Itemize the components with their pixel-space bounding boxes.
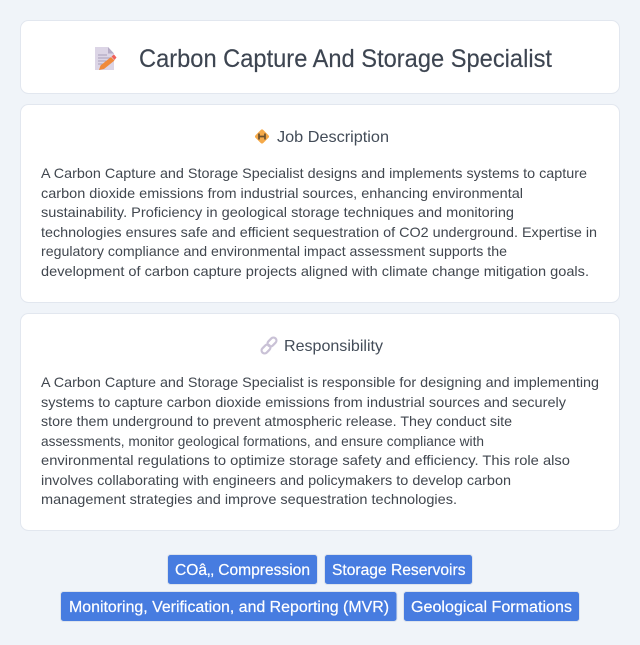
tag: CO2 compression: COâ‚‚ Compression — [175, 562, 310, 579]
text block: job description: sustainability. Proficiency in geological storage techniques and monitoring — [41, 205, 514, 220]
text block: job description: technologies ensures safe and efficient sequestration of CO2 underground. Expertise in — [41, 225, 597, 240]
heading: responsibility: Responsibility — [284, 338, 383, 355]
title: Carbon Capture And Storage Specialist — [139, 45, 552, 73]
text block: responsibility: assessments, monitor geological formations, and ensure compliance with — [41, 434, 484, 449]
text block: responsibility: A Carbon Capture and Storage Specialist is responsible for designing and implementing — [41, 375, 599, 390]
tag: geological formations — [404, 592, 580, 622]
text block: responsibility: management strategies and improve sequestration technologies. — [41, 492, 457, 507]
text block: job description: A Carbon Capture and Storage Specialist designs and implements systems to capture — [41, 166, 587, 181]
text block: job description — [41, 166, 597, 279]
text block: responsibility: store them underground to prevent atmospheric release. They conduct site — [41, 414, 512, 429]
panel: responsibility — [20, 314, 620, 530]
tag: storage reservoirs — [324, 554, 472, 584]
text block: responsibility: systems to capture carbon dioxide emissions from industrial sources and securely — [41, 395, 566, 410]
tag: monitoring, verification, and reporting: Monitoring, Verification, and Reporting (MVR) — [69, 599, 389, 616]
icon: document with pencil — [95, 47, 116, 70]
text block: responsibility — [41, 375, 599, 507]
tag: CO2 compression — [168, 554, 318, 584]
text block: job description: development of carbon capture projects aligned with climate change mitigation goals. — [41, 264, 589, 279]
panel: title header — [20, 20, 620, 94]
text block: responsibility: involves collaborating with engineers and policymakers to develop carbon — [41, 473, 511, 488]
tag: storage reservoirs: Storage Reservoirs — [332, 562, 466, 579]
text block: responsibility: environmental regulations to optimize storage safety and efficiency. This role also — [41, 453, 570, 468]
text block: job description: regulatory compliance and environmental impact assessment supports the — [41, 244, 507, 259]
heading: job description: Job Description — [277, 129, 389, 146]
icon: chain link — [260, 336, 278, 355]
panel: job description — [20, 104, 620, 302]
icon: orange diamond — [254, 129, 270, 144]
tag: geological formations: Geological Formations — [411, 599, 572, 616]
tag: monitoring, verification, and reporting — [60, 592, 397, 622]
text block: job description: carbon dioxide emissions from industrial sources, enhancing environmental — [41, 186, 523, 201]
